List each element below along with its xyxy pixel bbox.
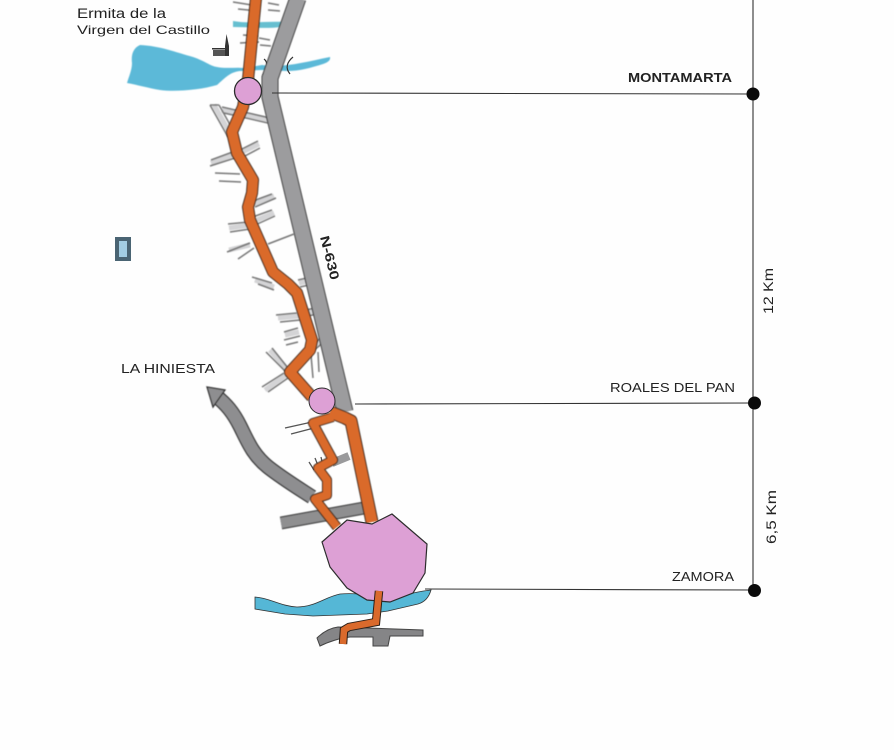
label: Virgen del Castillo: Virgen del Castillo: [77, 23, 210, 37]
town: Roales del Pan: [309, 388, 335, 414]
road south of river: [317, 627, 423, 646]
icon: hermitage church: [212, 34, 229, 56]
label: 12 Km: 12 Km: [761, 268, 776, 314]
river Duero: [255, 590, 431, 616]
label: N-630: N-630: [317, 234, 343, 281]
label: Roales del Pan: ROALES DEL PAN: [610, 380, 735, 395]
small link road: [332, 456, 349, 463]
label: Ermita: Ermita de la: [77, 6, 167, 21]
short side ticks: [285, 422, 323, 470]
icon: small blue marker: [115, 237, 131, 261]
reservoir and river at Montamarta: [127, 21, 330, 91]
orange route south of Zamora: [343, 591, 379, 644]
road: N-630: [270, 0, 345, 412]
label: Montamarta: MONTAMARTA: [628, 71, 732, 85]
town: Montamarta: [234, 78, 262, 104]
distance scale: [272, 0, 761, 597]
label: 6,5 Km: 6,5 Km: [764, 490, 779, 544]
label: Zamora: ZAMORA: [672, 570, 735, 584]
side road bands: [211, 105, 322, 390]
label: La Hiniesta: LA HINIESTA: [121, 361, 215, 376]
Zamora city: [322, 514, 427, 602]
side roads near Montamarta: [210, 2, 323, 392]
cross road north of Zamora: [281, 508, 364, 523]
road: to La Hiniesta with arrow: [207, 387, 312, 497]
dam brackets: [263, 57, 293, 75]
orange route: [232, 0, 372, 527]
